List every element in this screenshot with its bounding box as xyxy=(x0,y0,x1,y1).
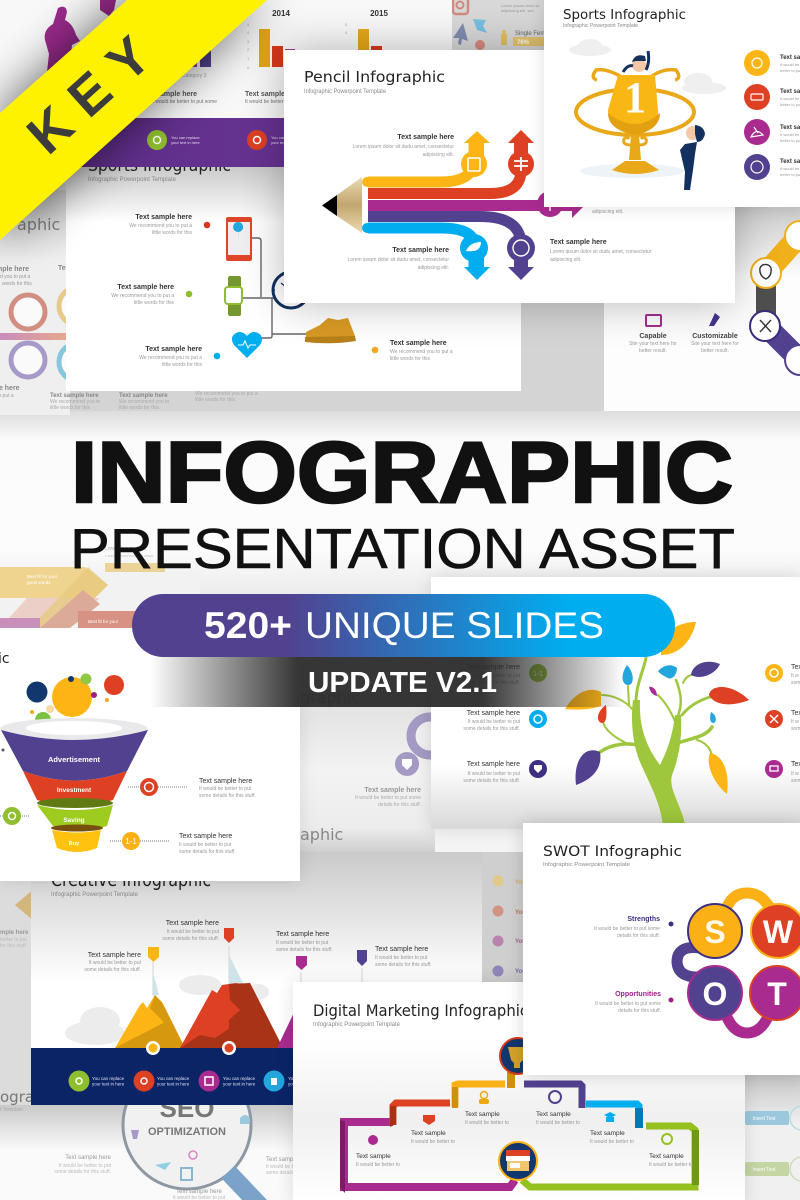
text and icon: step 1 xyxy=(356,1135,400,1168)
icons: right: It w xyxy=(791,673,799,679)
purple band: your text in here xyxy=(171,140,200,145)
callout: investment: Text sample here xyxy=(199,778,252,785)
icons: left xyxy=(529,664,547,778)
text: strengths: details for this stuff. xyxy=(617,933,660,939)
slide: middle gray (behind): aphic xyxy=(300,825,343,844)
illustration: cheering kid xyxy=(623,51,649,72)
text: left notes: It would be better to put xyxy=(468,673,521,679)
icon: shoe xyxy=(305,318,356,343)
illustration: trophy xyxy=(576,70,694,174)
text: item 1 xyxy=(129,214,210,236)
text and icon: step 1: Text sample xyxy=(356,1153,391,1160)
slide: creative mountains: Infographic Powerpoint Template xyxy=(51,892,139,898)
chart: bars 2015 xyxy=(345,9,388,67)
text: left notes: Text sample here xyxy=(467,664,520,671)
title: Sports Infographic xyxy=(88,156,231,176)
navy band: your text in here xyxy=(157,1082,190,1086)
slide: digital marketing: Infographic Powerpoint Template xyxy=(313,1022,401,1028)
navy band xyxy=(31,1041,482,1105)
text: item 2: Text sample here xyxy=(117,284,174,291)
text: note 3: Text sample here xyxy=(276,931,329,938)
text: right note: Text sample here xyxy=(550,239,607,246)
slide: social (faded, top right): 76% xyxy=(517,40,530,46)
text: faded caption xyxy=(355,787,421,808)
navy band: your text in here xyxy=(92,1082,125,1086)
title: presentation asset: PRESENTATION ASSET xyxy=(70,517,735,581)
pill: 520+ unique slides xyxy=(132,594,675,657)
slide: social (faded, top right): Single Female xyxy=(515,31,554,37)
text: rings slide caption fragments: Text sample here xyxy=(119,393,168,399)
text: capable: better result. xyxy=(639,348,667,354)
illustration: clouds xyxy=(569,39,726,178)
title: Digital Marketing Infographic xyxy=(313,1001,528,1020)
callout: buy: It would be better to put xyxy=(179,842,232,848)
icons: right: It w xyxy=(791,719,799,725)
text: note 2: Text sample here xyxy=(166,920,219,927)
chart: bars 2014: 2014 xyxy=(272,9,290,18)
purple band: your text in here xyxy=(271,140,300,145)
text and icon: step 4 xyxy=(536,1091,580,1126)
list: icons and labels xyxy=(744,50,800,180)
text: right note: Lorem ipsum dolor sit dudu amet, consectetur xyxy=(550,249,652,255)
text: note 4 xyxy=(375,946,432,968)
text: item 2 xyxy=(111,284,192,306)
slide: rings (faded, left) xyxy=(0,190,73,415)
slide: social (faded, top right): adipiscing elit, sed xyxy=(501,8,534,13)
template caption fragment: t Template xyxy=(0,1107,23,1113)
text: item 1: little words for this xyxy=(152,230,192,236)
clouds xyxy=(65,975,269,1045)
text: customizable: Site your text here for xyxy=(691,341,739,347)
list: icons and labels: It would be xyxy=(780,62,800,67)
slide: faded text behind title xyxy=(105,546,165,572)
connector lines xyxy=(241,238,306,338)
ring: face xyxy=(11,343,45,377)
slide: middle gray (behind) xyxy=(300,688,435,852)
navy band: You can replace xyxy=(288,1076,321,1081)
text and icon: step 5: Text sample xyxy=(590,1130,625,1137)
icon: store badge xyxy=(499,1142,537,1180)
text: capable: Site your text here for xyxy=(629,341,677,347)
purple band: You can replace xyxy=(171,135,200,140)
text: note 2 xyxy=(162,920,220,942)
text: item 4: little words for this xyxy=(390,356,431,362)
navy band: your text in here xyxy=(288,1082,321,1086)
magnifier xyxy=(123,1061,264,1200)
text: left notes: It would be better to put xyxy=(468,771,521,777)
text: note 1: Text sample here xyxy=(88,952,141,959)
slide: list (faded, right of creative): You xyxy=(515,969,526,975)
illustration: tree trunk and branches xyxy=(600,658,712,829)
icon: purple businesswoman silhouettes xyxy=(45,0,116,72)
text: chart notes xyxy=(140,91,311,105)
text: faded captions: Text sample here xyxy=(266,1157,312,1163)
ring: blue partial xyxy=(59,343,97,381)
slide: social (faded, top right): Lorem ipsum dolor sit xyxy=(501,3,540,8)
text: upper note: Lorem ipsum dolor sit dudu amet, consectetur xyxy=(353,144,454,150)
slide: faded text behind title: Lorem ipsum dolor sit amet xyxy=(105,553,154,558)
text: strengths xyxy=(594,916,674,939)
text and icon: step 3: It would be better to xyxy=(465,1120,509,1126)
text: strengths: Strengths xyxy=(627,916,660,923)
list: icons and labels: It would be xyxy=(780,96,800,101)
text: upper note xyxy=(353,134,454,158)
list: icons and labels: It would be xyxy=(780,166,800,171)
text: faded captions xyxy=(54,1155,312,1200)
text: lower note: adipiscing elit. xyxy=(418,265,449,271)
text: note 4: Text sample here xyxy=(375,946,428,953)
SWOT diagram: T xyxy=(767,976,787,1012)
icon: phone xyxy=(226,217,252,261)
slide: pencil: Infographic Powerpoint Template xyxy=(304,89,387,95)
text and icon: step 4: Text sample xyxy=(536,1111,571,1118)
SWOT diagram: S xyxy=(704,914,726,950)
text: faded captions: some details for this stuff. xyxy=(54,1169,111,1175)
icon: trophy badge xyxy=(500,1038,536,1074)
slide: rings (faded, left): Text xyxy=(58,265,73,272)
chart: bars 2015: 5 xyxy=(345,22,348,27)
ring: orange partial xyxy=(59,287,97,325)
purple band: You can replace xyxy=(271,135,300,140)
icons: right xyxy=(765,664,800,784)
slide: list (faded, right of creative): You xyxy=(515,910,526,916)
callout: investment: some details for this stuff. xyxy=(199,793,256,799)
text: item 2: We recommend you to put a xyxy=(111,293,174,299)
bubbles xyxy=(26,674,124,733)
text: faded caption: details for this stuff. xyxy=(378,802,421,808)
text and icon: step 5: It would be better to xyxy=(590,1139,634,1145)
slide: ribbons (faded, lower left): great words xyxy=(27,580,51,585)
pill: 520+ unique slides: UNIQUE SLIDES xyxy=(305,605,604,646)
funnel: Advertisement xyxy=(48,755,101,764)
arrow: magenta right xyxy=(368,191,583,218)
text: faded caption: It would be better to put some xyxy=(355,795,421,801)
text: item 3: little words for this xyxy=(162,362,202,368)
slide: faded text behind title: Lorem ipsum dolor xyxy=(105,546,147,552)
shadow: trophy slide xyxy=(544,0,800,207)
callout: buy: some details for this stuff. xyxy=(179,849,236,855)
magnifier: SEO xyxy=(160,1093,214,1123)
title: Creative Infographic xyxy=(51,869,211,891)
icon: heart xyxy=(232,332,262,358)
callout: buy: Text sample here xyxy=(179,833,232,840)
text: right note xyxy=(550,209,652,263)
chart: bars 2015: 4 xyxy=(345,30,348,35)
text: upper note: adipiscing elit. xyxy=(423,152,454,158)
text: opportunities: details for this stuff. xyxy=(618,1008,661,1014)
text: note 4: It would be better to put xyxy=(375,955,428,961)
navy band: You can replace xyxy=(157,1076,190,1081)
chart: bars 2014: 3 xyxy=(247,39,250,44)
title: Sports Infographic xyxy=(563,8,686,23)
slide: top left charts (behind) xyxy=(0,0,452,167)
pencil tip xyxy=(322,177,362,233)
text: item 1: We recommend you to put a xyxy=(129,223,192,229)
slide: insert text (faded, bottom right) xyxy=(745,1075,800,1182)
text and icon: step 2: Text sample xyxy=(411,1130,446,1137)
text and icon: step 4: It would be better to xyxy=(536,1120,580,1126)
callout: buy: 1-1 xyxy=(125,837,137,846)
text: item 4: We recommend you to put a xyxy=(390,349,453,355)
text: rings slide caption fragments: We recommend you to xyxy=(50,399,100,405)
text: rings slide caption fragments: little words for this xyxy=(119,405,160,411)
text: rings slide caption fragments: We recommend you to xyxy=(119,399,169,405)
text: customizable xyxy=(691,313,739,354)
chart: bars 2014 xyxy=(247,9,295,70)
text: rings slide caption fragments: We recommend you to put a xyxy=(195,391,258,397)
heading fragment: aphic xyxy=(17,215,60,234)
SWOT diagram: O xyxy=(703,976,727,1012)
shadow: pencil slide xyxy=(284,50,735,303)
text: note 1: some details for this stuff. xyxy=(84,967,141,973)
arrow: orange up xyxy=(362,131,490,187)
callout: investment xyxy=(128,778,256,799)
shadow: KEY ribbon xyxy=(0,0,267,240)
slide: tree xyxy=(431,577,800,829)
chart: bars 2015: 2015 xyxy=(370,9,388,18)
text: left notes: Text sample here xyxy=(467,710,520,717)
title: infographic: INFOGRAPHIC xyxy=(71,425,733,521)
slide: social (faded, top right) xyxy=(452,0,554,50)
heading fragments: graphic xyxy=(300,688,360,707)
slide: pencil xyxy=(284,50,735,303)
text: left notes xyxy=(463,664,521,784)
text: faded caption: Text sample here xyxy=(364,787,421,794)
text: faded captions: Text sample here xyxy=(176,1189,222,1195)
icons: right: It w xyxy=(791,771,799,777)
text: item 1: Text sample here xyxy=(135,214,192,221)
text: item 4: Text sample here xyxy=(390,340,447,347)
illustration: man xyxy=(680,125,705,190)
text and icon: step 2 xyxy=(411,1115,455,1145)
text: left notes: It would be better to put xyxy=(468,719,521,725)
text: left notes: Text sample here xyxy=(467,761,520,768)
arrow: blue down xyxy=(362,223,490,280)
update band: UPDATE V2.1 xyxy=(308,667,497,699)
text: note 3: some details for this stuff. xyxy=(276,947,333,953)
slide: rings (faded, left): d you to put a xyxy=(0,274,31,280)
text: chart notes: It would be better to put some xyxy=(151,99,217,105)
chart: partial purple bars: Category 3 xyxy=(182,73,207,79)
text: rings slide caption fragments: Text sample here xyxy=(50,393,99,399)
text: lower note: Text sample here xyxy=(392,247,449,254)
text: capable xyxy=(629,315,677,354)
text: customizable: better result. xyxy=(701,348,729,354)
chart: bars 2014: 5 xyxy=(247,22,250,27)
text and icon: step 1: It would be better to xyxy=(356,1162,400,1168)
funnel: Investment xyxy=(57,787,92,794)
navy band: You can replace xyxy=(223,1076,256,1081)
title: Pencil Infographic xyxy=(304,68,445,86)
text: item 3: We recommend you to put a xyxy=(139,355,202,361)
slide: left faded edge: for this stuff xyxy=(0,943,26,949)
slide: left faded edge: mple here xyxy=(0,930,29,936)
slide: funnel xyxy=(0,628,300,881)
slide: sports devices xyxy=(66,156,521,391)
text: rings slide caption fragments xyxy=(50,391,258,411)
text: opportunities xyxy=(595,991,674,1014)
text and icon: step 3: Text sample xyxy=(465,1111,500,1118)
slide: ribbons (faded, lower left) xyxy=(0,567,136,628)
slide: creative mountains xyxy=(31,852,482,1105)
steps ribbon xyxy=(340,1072,699,1193)
slide: ribbons (faded, lower left): Best fit for your xyxy=(88,619,119,624)
text: left notes: some details for this stuff. xyxy=(463,680,520,686)
slide: trophy: Infographic Powerpoint Template xyxy=(563,23,638,29)
text: chart notes: It would be better to put some xyxy=(245,99,311,105)
text: right note: adipiscing elit. xyxy=(550,257,581,263)
list: icons and labels: It would be xyxy=(780,132,800,137)
arrow: purple down xyxy=(368,216,535,280)
slide: left faded edge: better to put xyxy=(0,937,27,943)
magnifier: OPTIMIZATION xyxy=(148,1126,226,1138)
callout: buy xyxy=(110,832,236,855)
text: left notes: some details for this stuff. xyxy=(463,778,520,784)
navy band: your text in here xyxy=(223,1082,256,1086)
text: note 1 xyxy=(84,952,142,973)
slide: left faded edge xyxy=(0,881,34,1106)
text: customizable: Customizable xyxy=(692,333,738,340)
text and icon: step 3 xyxy=(465,1092,509,1126)
funnel: Buy xyxy=(69,841,80,847)
slide: digital marketing xyxy=(293,982,745,1200)
text: strengths: It would be better to put some xyxy=(594,926,660,932)
icons: left: 1-1 xyxy=(533,671,543,678)
text: faded captions: Text sample here xyxy=(65,1155,112,1161)
slide: insert text (faded, bottom right): Insert Text xyxy=(753,1167,776,1173)
text: rings slide caption fragments: little words for this xyxy=(195,397,236,403)
pill: 520+ unique slides: 520+ xyxy=(204,605,292,646)
text: upper note: Text sample here xyxy=(397,134,454,141)
icon: watch xyxy=(225,276,242,316)
text: rings slide caption fragments: little words for this xyxy=(50,405,91,411)
mountain: red xyxy=(180,928,283,1048)
chart: bars 2014: 0 xyxy=(247,65,250,70)
purple band xyxy=(0,118,552,167)
text: opportunities: It would be better to put some xyxy=(595,1001,661,1007)
text: opportunities: Opportunities xyxy=(615,991,661,998)
shadow: funnel slide xyxy=(0,706,300,881)
slide: ribbons (faded, lower left): Best fit for your xyxy=(27,574,58,579)
slide: trophy xyxy=(544,0,800,207)
text: item 4 xyxy=(372,340,453,362)
text: right note: adipiscing elit. xyxy=(592,209,623,215)
slide: chain (right) xyxy=(604,207,800,411)
text: item 3 xyxy=(139,346,220,368)
text and icon: step 6: Text sample xyxy=(649,1153,684,1160)
text: note 4: some details for this stuff. xyxy=(375,962,432,968)
text: lower note: Lorem ipsum dolor sit dudu amet, consectetur xyxy=(348,257,449,263)
chart: bars 2014: 1 xyxy=(247,56,250,61)
ring: coffee xyxy=(11,295,45,329)
connector bar xyxy=(0,333,70,340)
slide: list (faded, right of creative): You xyxy=(515,880,526,886)
text: faded captions: It would be better xyxy=(266,1164,305,1170)
mountain: yellow xyxy=(115,947,185,1048)
chart: partial purple bars xyxy=(182,50,211,79)
text: note 2: some details for this stuff. xyxy=(162,936,219,942)
text: note 2: It would be better to put xyxy=(167,929,220,935)
ribbon: KEY xyxy=(0,0,267,240)
text and icon: step 6: It would be better to xyxy=(649,1162,693,1168)
slide: SWOT: Infographic Powerpoint Template xyxy=(543,862,630,868)
text: item 3: Text sample here xyxy=(145,346,202,353)
text: note 1: It would be better to put xyxy=(89,960,142,966)
text: chart notes: Text sample here xyxy=(245,91,302,98)
text: note 3 xyxy=(276,931,333,953)
ribbon: KEY: KEY xyxy=(16,14,174,166)
title: SWOT Infographic xyxy=(543,844,682,860)
slide: rings (faded, left): words for this xyxy=(2,281,32,287)
text: faded captions: It would be better to put xyxy=(59,1163,112,1169)
icon: faded purple rings xyxy=(395,717,449,776)
shadow: SWOT slide xyxy=(523,823,800,1075)
text: left notes: some details for this stuff. xyxy=(463,726,520,732)
text and icon: step 5 xyxy=(590,1112,634,1145)
slide: left faded edge: ogra xyxy=(0,1088,34,1106)
text: item 2: little words for this xyxy=(134,300,174,306)
callout: investment: It would be better to put xyxy=(199,786,252,792)
text: faded captions: some details xyxy=(266,1170,295,1176)
illustration: trophy: 1 xyxy=(624,73,646,122)
slide: list (faded, right of creative) xyxy=(482,852,526,982)
funnel: Saving xyxy=(63,817,85,824)
funnel xyxy=(0,718,148,852)
shadow: digital marketing slide xyxy=(293,982,745,1200)
update band xyxy=(150,657,625,707)
slide: sports devices: Infographic Powerpoint Template xyxy=(88,177,177,183)
callout: saving xyxy=(0,748,30,825)
text: note 3: It would be better to put xyxy=(276,940,329,946)
shadow: tree slide xyxy=(431,577,800,829)
chart: bars 2014: 4 xyxy=(247,30,250,35)
chain diagram xyxy=(750,221,800,375)
text: capable: Capable xyxy=(639,333,667,340)
arrow: red up xyxy=(368,130,534,194)
text and icon: step 2: It would be better to xyxy=(411,1139,455,1145)
mountain: magenta xyxy=(277,950,367,1048)
slide: insert text (faded, bottom right): Insert Text xyxy=(753,1116,776,1122)
navy band: You can replace xyxy=(92,1076,125,1081)
icon: clock xyxy=(272,272,309,308)
illustration: leaves xyxy=(565,622,749,794)
text and icon: step 6 xyxy=(649,1134,693,1168)
SWOT diagram xyxy=(677,893,800,1033)
chart: bars 2014: 2 xyxy=(247,47,250,52)
text: chart notes: Text sample here xyxy=(140,91,197,98)
SWOT diagram: W xyxy=(763,914,794,950)
slide: list (faded, right of creative): You xyxy=(515,939,526,945)
slide: SEO (faded, bottom left) xyxy=(0,1093,312,1200)
text: lower note xyxy=(348,247,449,271)
slide: SWOT xyxy=(523,823,800,1075)
